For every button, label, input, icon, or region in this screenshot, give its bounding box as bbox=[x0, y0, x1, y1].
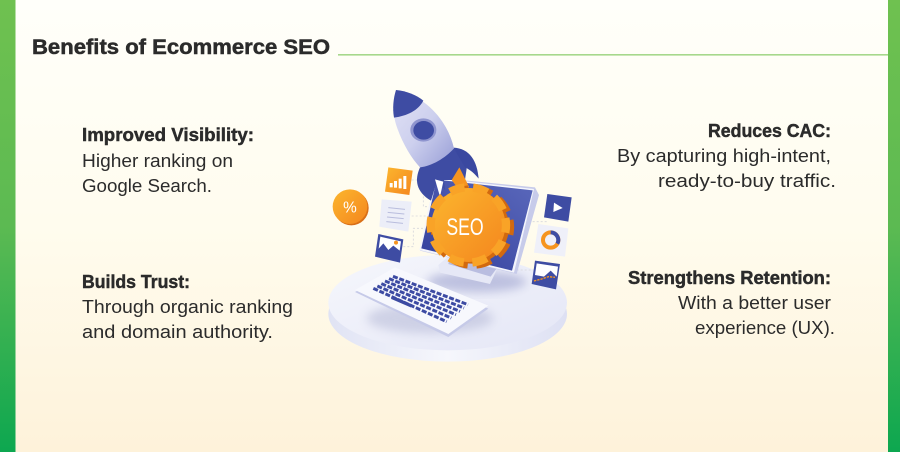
platform disc bbox=[328, 255, 567, 362]
left fin and nozzle bbox=[417, 148, 467, 201]
gear with SEO label bbox=[431, 187, 510, 265]
text block: strengthens retention: With a better user bbox=[678, 293, 831, 313]
text block: builds trust bbox=[82, 272, 293, 342]
text block: builds trust: Builds Trust: bbox=[82, 272, 190, 292]
text block: reduces CAC: Reduces CAC: bbox=[708, 121, 831, 141]
icon: line chart card bbox=[532, 261, 560, 289]
title: Benefits of Ecommerce SEO bbox=[32, 36, 330, 59]
text block: reduces CAC bbox=[617, 121, 836, 191]
icon: percent coin bbox=[333, 189, 369, 225]
icon: image card bbox=[375, 234, 403, 263]
text block: improved visibility: Higher ranking on bbox=[82, 151, 233, 171]
text block: improved visibility bbox=[82, 125, 254, 196]
text block: strengthens retention bbox=[628, 268, 835, 338]
icon: percent coin: % bbox=[343, 199, 357, 216]
keyboard bbox=[355, 267, 488, 337]
icon: document card bbox=[379, 199, 412, 232]
rocket bbox=[393, 90, 479, 201]
text block: strengthens retention: experience (UX). bbox=[695, 318, 835, 338]
text block: reduces CAC: ready-to-buy traffic. bbox=[658, 171, 836, 191]
icon: bar chart card bbox=[385, 167, 413, 195]
gear with SEO label: SEO bbox=[446, 214, 484, 241]
white flame bbox=[435, 179, 443, 197]
text block: improved visibility: Google Search. bbox=[82, 176, 212, 196]
icon: play card bbox=[544, 194, 572, 222]
orange flame bbox=[452, 167, 469, 197]
text block: improved visibility: Improved Visibility: bbox=[82, 125, 254, 145]
illustration: SEO rocket and computer bbox=[328, 90, 572, 362]
text block: reduces CAC: By capturing high-intent, bbox=[617, 146, 831, 166]
monitor bbox=[419, 177, 539, 284]
right green bar bbox=[888, 0, 900, 452]
right fin bbox=[453, 148, 479, 179]
icon: donut chart card bbox=[534, 224, 568, 257]
left green bar bbox=[0, 0, 16, 452]
text block: builds trust: Through organic ranking bbox=[82, 297, 293, 317]
title rule bbox=[338, 54, 888, 56]
text block: builds trust: and domain authority. bbox=[82, 322, 273, 342]
connector lines bbox=[403, 180, 547, 270]
text block: strengthens retention: Strengthens Retention: bbox=[628, 268, 831, 288]
